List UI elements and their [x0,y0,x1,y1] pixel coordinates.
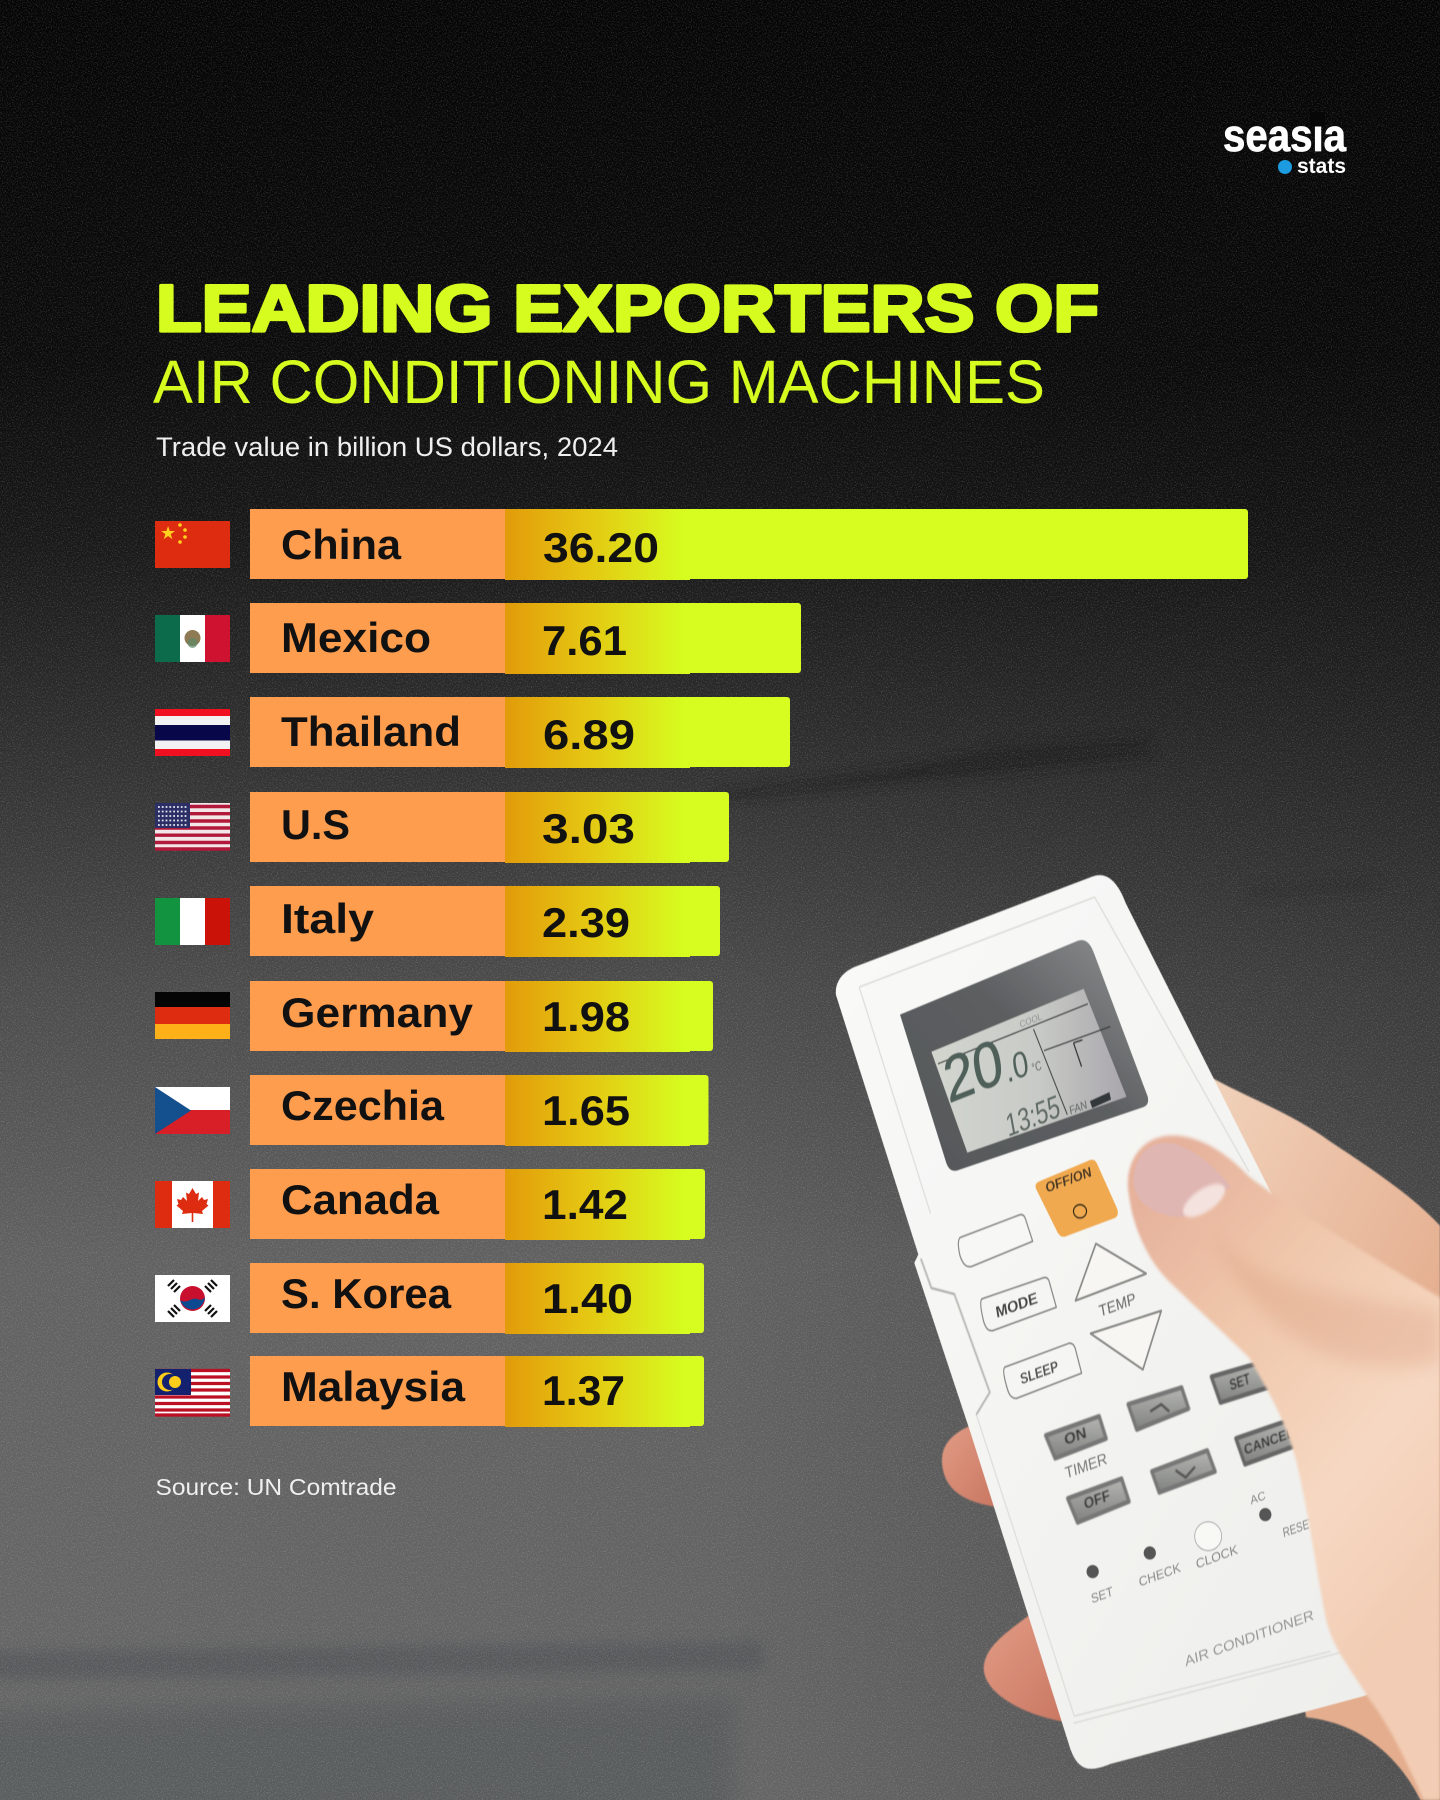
temp label: TEMP [1098,1290,1137,1320]
sleep button: SLEEP [1019,1357,1060,1388]
flag: Canada [155,1181,230,1228]
thumbnail [1134,1143,1231,1217]
set button: SET [1228,1370,1251,1394]
flag: Italy [155,898,230,945]
indicator lights and labels: AIR CONDITIONER [1184,1607,1315,1670]
row: Thailand: 6.89 [543,711,635,758]
timer off button [1068,1479,1129,1522]
row: Malaysia [155,1356,704,1427]
timer on button [1046,1416,1106,1458]
row: China: 36.20 [543,524,659,571]
thumbnail highlight [1180,1177,1228,1224]
row: Mexico: Mexico [281,614,431,661]
row: S. Korea [155,1263,704,1334]
row: Malaysia: Malaysia [281,1363,466,1410]
flag: China [155,521,230,568]
logo: seasia stats [1223,110,1347,178]
row: Canada [155,1169,705,1240]
row: Mexico [155,603,801,674]
flag: Mexico [155,615,230,662]
power button [1036,1160,1118,1237]
row: Czechia: Czechia [281,1082,445,1129]
LCD screen: 20 [938,1024,1008,1117]
row: Thailand: Thailand [281,708,461,755]
row: Czechia [155,1075,708,1146]
timer off button: OFF [1083,1486,1111,1513]
LCD screen: COOL [1019,1011,1043,1030]
fingers behind remote [942,1424,1073,1723]
indicator lights and labels: RESET [1282,1516,1316,1541]
row: Italy [155,886,720,957]
row: S. Korea: S. Korea [281,1270,452,1317]
row: S. Korea: 1.40 [542,1275,633,1322]
row: Mexico: 7.61 [542,617,627,664]
timer label: TIMER [1064,1450,1108,1482]
row: Italy: 2.39 [542,899,630,946]
flag: United States [155,803,230,850]
row: Italy: Italy [281,895,375,942]
title [153,271,1099,462]
illustration: hand holding remote [836,875,1440,1800]
row: U.S: U.S [281,801,350,848]
row: Canada: Canada [281,1176,440,1223]
logo: seasia stats: stats [1297,155,1346,178]
mode button: MODE [994,1288,1039,1321]
bar chart: exporters [155,509,1248,1427]
thumb and palm [1128,1135,1440,1800]
LCD screen: FAN [1069,1099,1088,1118]
row: U.S [155,792,729,863]
indicator lights and labels [1087,1490,1316,1670]
row: Germany: 1.98 [542,993,630,1040]
down arrow button [1152,1450,1215,1492]
sleep button [1004,1343,1082,1398]
row: Germany: Germany [281,989,474,1036]
back of hand [1206,1075,1440,1800]
subtitle: Trade value in billion US dollars, 2024 [156,432,618,462]
LCD screen: 13:55 [1003,1088,1063,1144]
thumb shading [1208,1232,1440,1367]
LCD screen [900,940,1148,1171]
LCD screen: °C [1031,1059,1043,1076]
blank button [958,1215,1033,1267]
indicator lights and labels: CLOCK [1195,1543,1239,1572]
flag: China: ★ [160,523,176,543]
row: Canada: 1.42 [542,1181,628,1228]
timer on button: ON [1063,1424,1088,1449]
row: U.S: 3.03 [542,805,635,852]
indicator lights and labels: SET [1090,1585,1114,1607]
row: China: China [281,521,402,568]
remote body [836,875,1371,1769]
power button: OFF/ON [1044,1164,1093,1196]
flag: Czechia [155,1087,230,1134]
flag: Germany [155,992,230,1039]
cancel button [1236,1420,1299,1464]
indicator lights and labels: AC [1249,1490,1267,1508]
remote inner lines [859,897,1367,1723]
source note: Source: UN Comtrade [156,1474,396,1500]
LCD screen: .0 [1001,1041,1032,1091]
row: Malaysia: 1.37 [542,1367,625,1414]
row: Czechia: 1.65 [542,1087,630,1134]
heading line 1: LEADING EXPORTERS OF [156,271,1099,345]
flag: South Korea [155,1275,230,1322]
temperature up [1076,1244,1146,1301]
up arrow button [1128,1388,1189,1430]
row: Germany [155,981,713,1052]
flag: Malaysia [155,1369,230,1416]
heading line 2: AIR CONDITIONING MACHINES [153,348,1045,416]
temperature down [1091,1311,1161,1370]
row: Thailand [155,697,790,768]
row: China [155,509,1248,580]
indicator lights and labels: CHECK [1138,1561,1182,1590]
cancel button: CANCEL [1243,1424,1295,1458]
mode button [981,1278,1056,1331]
remote control [836,875,1371,1769]
remote side clip [921,1259,990,1415]
logo: seasia stats: seasia [1223,110,1347,161]
set button [1211,1362,1271,1403]
flag: Thailand [155,709,230,756]
